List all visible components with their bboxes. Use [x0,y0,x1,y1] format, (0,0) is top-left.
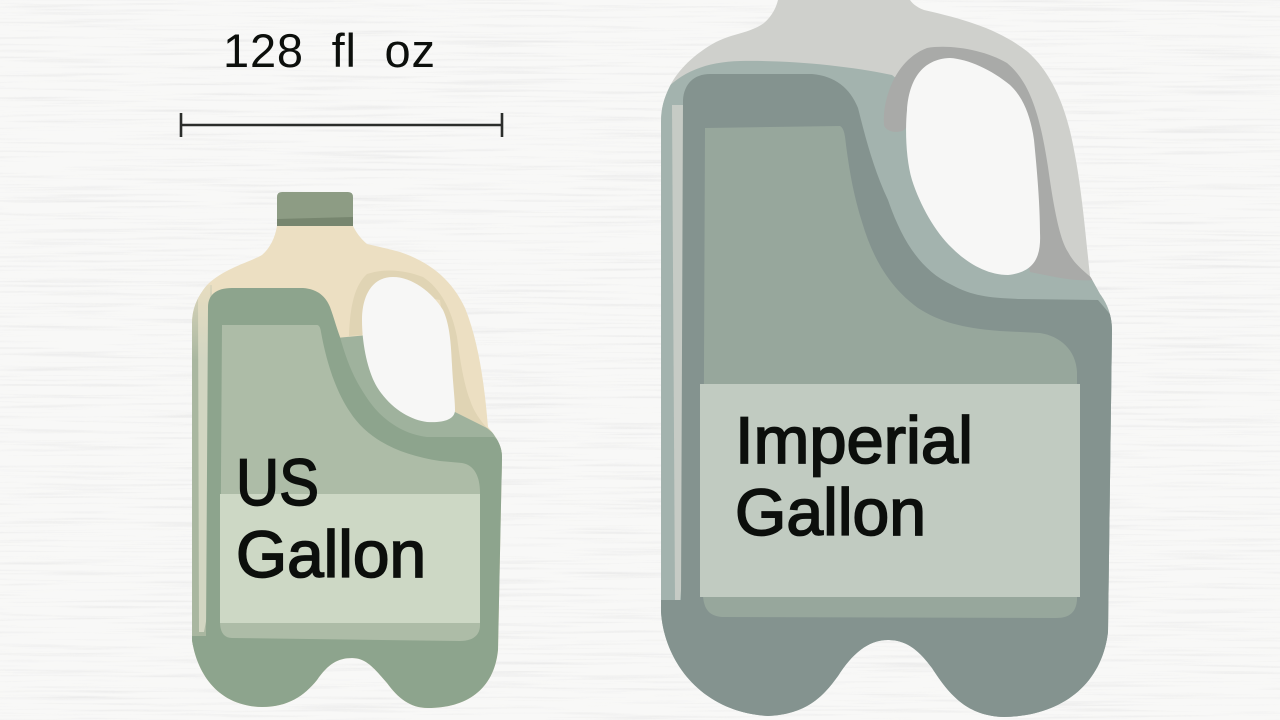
dimension bar [181,113,502,137]
handle shading [349,270,487,428]
US jug liquid layers [180,270,510,720]
left edge highlight [192,285,212,645]
liquid light band [336,330,504,480]
liquid inner [703,126,1077,618]
Imperial gallon text: Imperial [735,403,973,477]
liquid dark band [650,74,1115,720]
measurement label: 128 fl oz: 128 fl oz [223,24,435,77]
Imperial jug liquid layers [650,47,1115,720]
Imperial gallon label panel [700,384,1080,597]
US gallon jug [180,192,510,720]
handle ring shading [884,47,1094,280]
US jug cap [277,192,353,226]
Imperial jug handle hole [906,58,1040,275]
US jug handle hole [362,277,455,422]
liquid inner [220,325,480,641]
US gallon label panel [220,494,480,623]
US gallon text: US [236,445,319,519]
liquid dark band [180,288,510,720]
Imperial gallon jug: Gallon [735,475,926,549]
Imperial jug body and handle [661,0,1112,717]
US jug body and handle [192,226,502,708]
liquid light band [650,61,1115,720]
US gallon jug: Gallon [236,517,426,591]
Imperial gallon jug [650,0,1115,720]
left edge highlight [672,105,683,600]
